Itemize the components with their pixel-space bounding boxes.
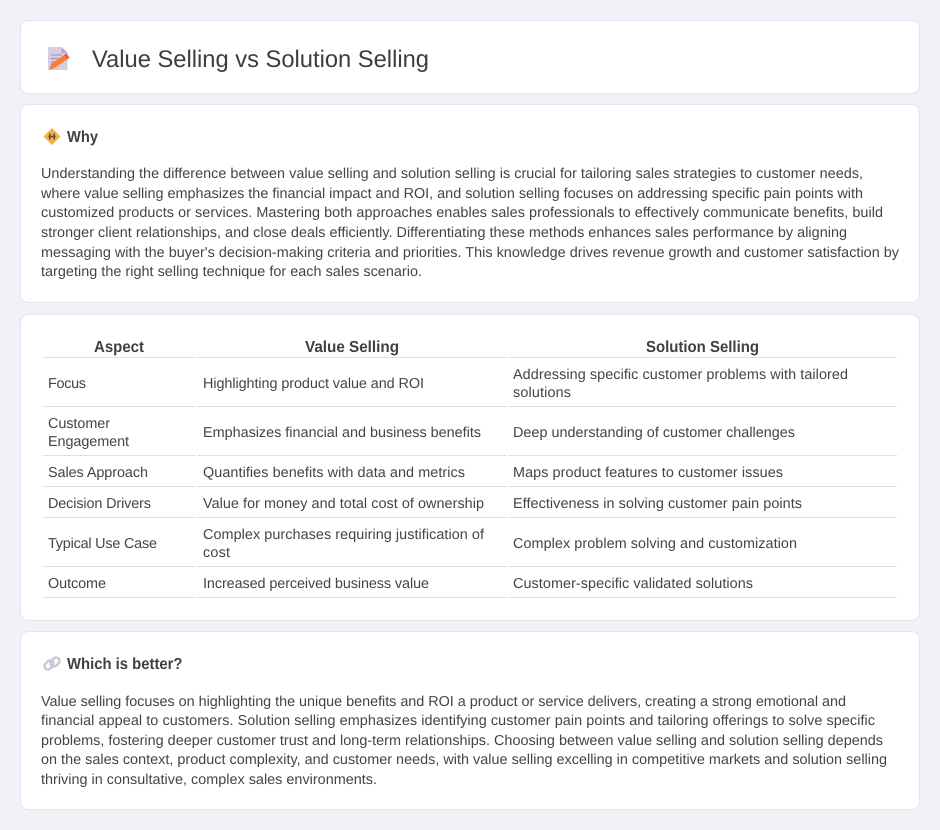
- row: typical use case: cost: [203, 545, 230, 561]
- text block: which is better paragraph: problems, fostering deeper customer trust and long-term relationships. Choosing between value selling and solution selling depends: [41, 733, 883, 749]
- panel: which is better: [20, 632, 920, 810]
- row: outcome: Increased perceived business value: [203, 576, 429, 592]
- text block: why paragraph: [40, 166, 900, 280]
- table header row: Solution Selling: [646, 339, 759, 356]
- row: typical use case: [48, 527, 797, 561]
- row: decision drivers: Decision Drivers: [48, 496, 151, 512]
- row: focus: Focus: [48, 376, 86, 392]
- row: outcome: Outcome: [48, 576, 106, 592]
- row: sales approach: Maps product features to customer issues: [513, 465, 783, 481]
- row: customer engagement: Deep understanding of customer challenges: [513, 425, 795, 441]
- row: focus: solutions: [513, 385, 571, 401]
- row: outcome: [48, 576, 753, 592]
- table header row: Aspect: [94, 339, 145, 356]
- text block: which is better paragraph: thriving in consultative, complex sales environments.: [41, 772, 377, 788]
- text block: which is better paragraph: financial appeal to customers. Solution selling emphasizes identifying customer pain points and tailoring offerings to solve specific: [41, 713, 875, 729]
- text block: which is better paragraph: Value selling focuses on highlighting the unique benefits and ROI a product or service delivers, creating a strong emotional and: [41, 694, 846, 710]
- icon: memo with pencil: [48, 47, 70, 70]
- icon: chain link: [43, 656, 61, 671]
- icon: orange diamond sign: [44, 128, 60, 145]
- row: focus: Addressing specific customer problems with tailored: [513, 367, 848, 383]
- text block: which is better paragraph: [41, 694, 887, 788]
- text block: why paragraph: Understanding the difference between value selling and solution selling is crucial for tailoring sales strategies to customer needs,: [41, 166, 863, 182]
- row: typical use case: Complex problem solving and customization: [513, 536, 797, 552]
- text block: why paragraph: stronger client relationships, and close deals efficiently. Differentiating these methods enhances sales performance by aligning: [41, 225, 847, 241]
- row: customer engagement: Emphasizes financial and business benefits: [203, 425, 481, 441]
- row: sales approach: Sales Approach: [48, 465, 148, 481]
- row: typical use case: Typical Use Case: [48, 536, 157, 552]
- row: decision drivers: Effectiveness in solving customer pain points: [513, 496, 802, 512]
- panel: title header: [20, 20, 920, 94]
- row: sales approach: [48, 465, 783, 481]
- row: focus: [48, 367, 848, 401]
- heading: which is better: Which is better?: [67, 656, 182, 673]
- panel: comparison table: [20, 314, 920, 620]
- text block: which is better paragraph: on the sales context, product complexity, and customer needs, with value selling excelling in competitive markets and solution selling: [41, 752, 887, 768]
- table rules: [43, 357, 897, 598]
- table header row: [94, 339, 759, 356]
- table header row: Value Selling: [305, 339, 399, 356]
- text block: why paragraph: messaging with the buyer's decision-making criteria and priorities. This knowledge drives revenue growth and customer satisfaction by: [41, 245, 900, 261]
- row: decision drivers: [48, 496, 802, 512]
- text block: why paragraph: customized products or services. Mastering both approaches enables sales professionals to effectively communicate benefits, build: [41, 205, 883, 221]
- row: customer engagement: [48, 416, 795, 450]
- text block: why paragraph: targeting the right selling technique for each sales scenario.: [41, 264, 422, 280]
- text block: why paragraph: where value selling emphasizes the financial impact and ROI, and solution selling focuses on addressing specific pain points with: [40, 186, 863, 202]
- row: decision drivers: Value for money and total cost of ownership: [203, 496, 484, 512]
- row: customer engagement: Engagement: [48, 434, 129, 450]
- row: typical use case: Complex purchases requiring justification of: [203, 527, 485, 543]
- row: sales approach: Quantifies benefits with data and metrics: [203, 465, 465, 481]
- row: customer engagement: Customer: [48, 416, 110, 432]
- heading: why: Why: [67, 129, 98, 146]
- row: focus: Highlighting product value and ROI: [203, 376, 424, 392]
- panel: why: [20, 104, 920, 302]
- row: outcome: Customer-specific validated solutions: [513, 576, 753, 592]
- title: Value Selling vs Solution Selling: [92, 46, 429, 73]
